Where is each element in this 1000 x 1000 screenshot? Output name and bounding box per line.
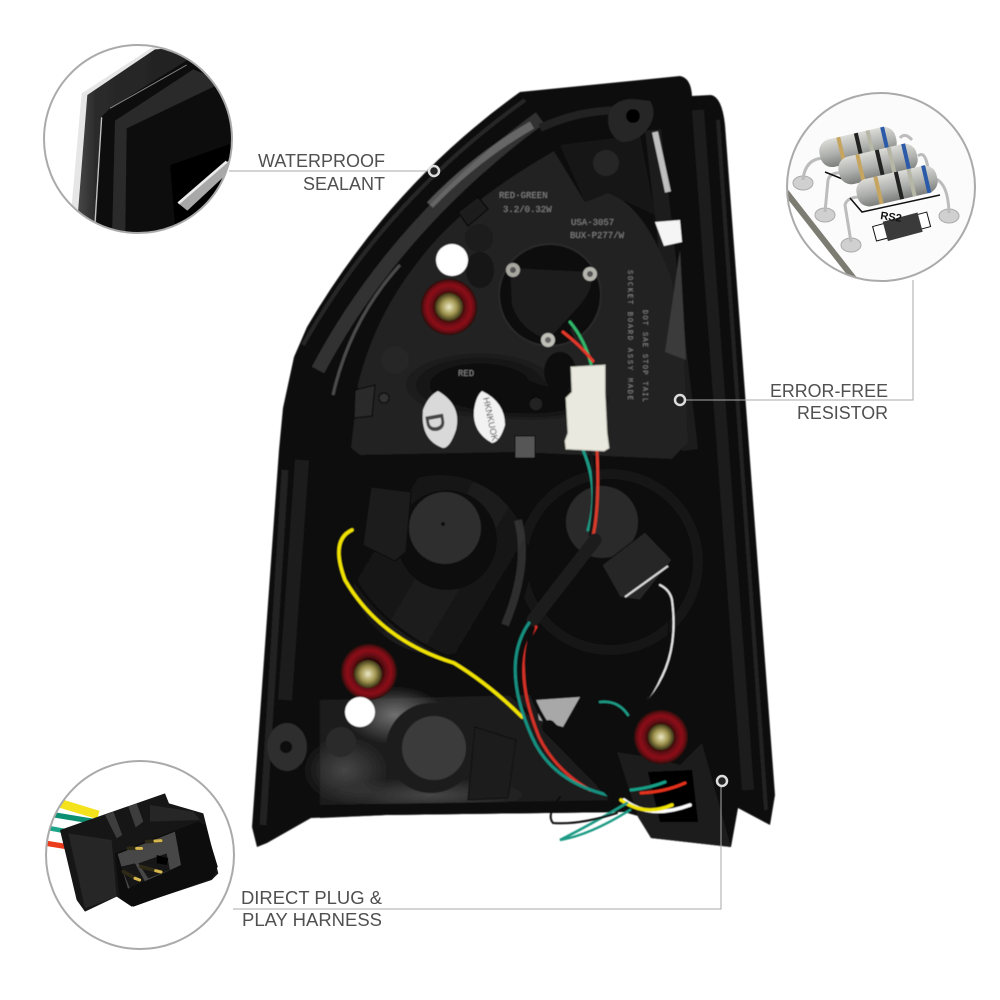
labels D and HKNKUOK: D: [419, 411, 452, 435]
bulb connectors: [363, 487, 672, 800]
label: error-free resistor: ERROR-FREE: [770, 381, 888, 401]
callout marker: waterproof sealant: [429, 166, 439, 176]
embossed markings: BUX-P277/W: [570, 231, 625, 241]
harness mounting plate: [617, 743, 731, 847]
embossed markings: SOCKET BOARD ASSY MADE: [625, 270, 633, 400]
embossed markings: RED·GREEN: [499, 191, 548, 201]
upper circuit panel: [351, 151, 688, 459]
label: direct plug and play harness: DIRECT PLUG &: [241, 888, 382, 908]
lower bulb housings: [350, 474, 698, 655]
embossed markings: RED: [458, 369, 474, 379]
label: error-free resistor: RESISTOR: [797, 403, 888, 423]
white adjuster caps: [345, 244, 468, 727]
embossed markings: USA-3057: [571, 218, 614, 228]
SMD chip: [872, 210, 931, 244]
embossed markings: 3.2/0.32W: [503, 205, 552, 215]
rubber grommets: [267, 99, 654, 771]
resistors: [819, 126, 897, 167]
embossed markings: [458, 191, 655, 626]
plate window: [648, 770, 698, 822]
embossed markings: USA-3057: [604, 605, 647, 615]
detail circle: error-free resistor: RS2: [880, 210, 902, 225]
wiring harness: [339, 322, 690, 840]
round socket with triangular cover: [499, 244, 601, 347]
callout line: waterproof sealant: [229, 170, 430, 172]
lower reflector: [300, 685, 620, 818]
housing bezel highlights: [263, 100, 766, 825]
red lens grommets: [341, 279, 688, 764]
label: waterproof sealant: WATERPROOF: [258, 151, 385, 171]
lamp housing silhouette: [252, 76, 775, 847]
callout line: error-free resistor: [684, 280, 913, 400]
label: waterproof sealant: SEALANT: [303, 174, 385, 194]
small white connector on side: [655, 220, 682, 246]
main product: tail lamp: [252, 76, 775, 847]
detail circle: waterproof sealant: [43, 44, 233, 234]
detail circle: direct plug harness: [45, 760, 235, 950]
harness white plug: [565, 365, 609, 451]
embossed markings: DOT SAE STOP TAIL: [640, 310, 648, 402]
callout line: direct plug harness: [233, 786, 721, 909]
pads and leads: [793, 176, 959, 252]
embossed markings: BUX-P277/W: [600, 616, 655, 626]
labels D and HKNKUOK: [419, 391, 505, 448]
callout marker: direct plug harness: [717, 776, 727, 786]
lower socket cap: [326, 703, 476, 793]
labels D and HKNKUOK: HKNKUOK: [481, 396, 500, 442]
label: direct plug and play harness: PLAY HARNESS: [242, 910, 382, 930]
callout marker: error-free resistor: [675, 395, 685, 405]
mounting clips: [354, 197, 543, 458]
detail circle: error-free resistor: [786, 92, 976, 282]
